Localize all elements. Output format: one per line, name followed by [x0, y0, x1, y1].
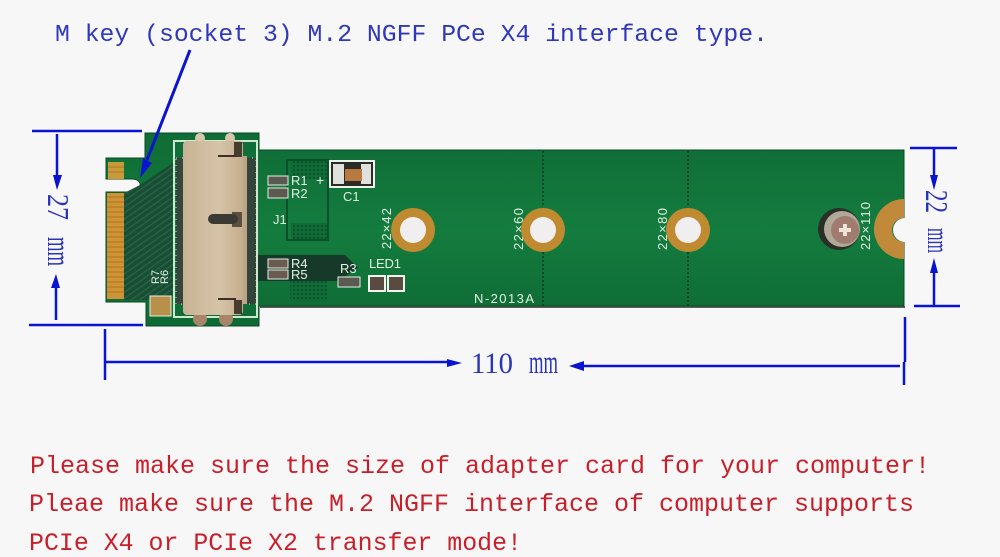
warning text: Pleae make sure the M.2 NGFF interface of computer supports — [29, 490, 914, 519]
silkscreen labels — [150, 172, 873, 306]
gold edge contacts — [107, 162, 124, 299]
dimension: 22 mm: mm — [921, 228, 956, 253]
panel: adapter circuit board — [106, 133, 905, 326]
silkscreen labels: R2 — [291, 186, 308, 201]
connector silkscreen frame — [174, 141, 257, 317]
capacitor C1 — [330, 161, 374, 187]
silkscreen labels: R6 — [159, 270, 171, 284]
silkscreen labels: C1 — [343, 189, 360, 204]
signal traces — [124, 162, 174, 300]
silkscreen labels: 22×60 — [511, 208, 526, 250]
silkscreen labels: R7 — [150, 270, 162, 284]
board outline — [106, 133, 904, 326]
silkscreen labels: R3 — [340, 261, 357, 276]
dimension: 110 mm: 110 — [471, 347, 513, 380]
silkscreen labels: LED1 — [369, 256, 401, 271]
silkscreen labels: 22×80 — [655, 208, 670, 250]
semicircular end notch — [874, 199, 905, 259]
mounting holes — [391, 208, 710, 252]
screw — [818, 208, 860, 250]
silkscreen labels: R1 — [291, 173, 308, 188]
silkscreen labels: 22×42 — [379, 208, 394, 249]
dimension: 22 mm — [910, 148, 960, 306]
arrow: pointer to M key notch — [140, 50, 190, 178]
metal connector body — [183, 133, 247, 326]
dimension: 27 mm — [29, 131, 143, 325]
small components R1 R2 R4 R5 R3 — [150, 176, 360, 316]
silkscreen labels: 22×110 — [858, 202, 873, 250]
warning text: Please make sure the size of adapter card for your computer! — [30, 452, 930, 481]
dimension: 22 mm: 22 — [919, 190, 955, 213]
warning text — [29, 452, 930, 557]
copper zone traces — [258, 160, 358, 301]
LED1 pads — [369, 276, 404, 291]
title: interface type: M key (socket 3) M.2 NGFF PCe X4 interface type. — [55, 22, 768, 49]
dimension: 110 mm — [105, 317, 905, 385]
dimension: 27 mm: mm — [40, 237, 76, 266]
silkscreen labels: R5 — [291, 267, 308, 282]
silkscreen labels: R4 — [291, 256, 308, 271]
silkscreen labels: + — [316, 172, 324, 188]
silkscreen labels: N-2013A — [474, 291, 534, 306]
dimension: 110 mm: mm — [529, 345, 558, 381]
connector pins — [176, 158, 256, 304]
dimension: 27 mm: 27 — [41, 194, 76, 220]
board shadow — [260, 306, 905, 308]
perforation lines — [543, 151, 688, 306]
silkscreen labels: J1 — [273, 212, 287, 227]
